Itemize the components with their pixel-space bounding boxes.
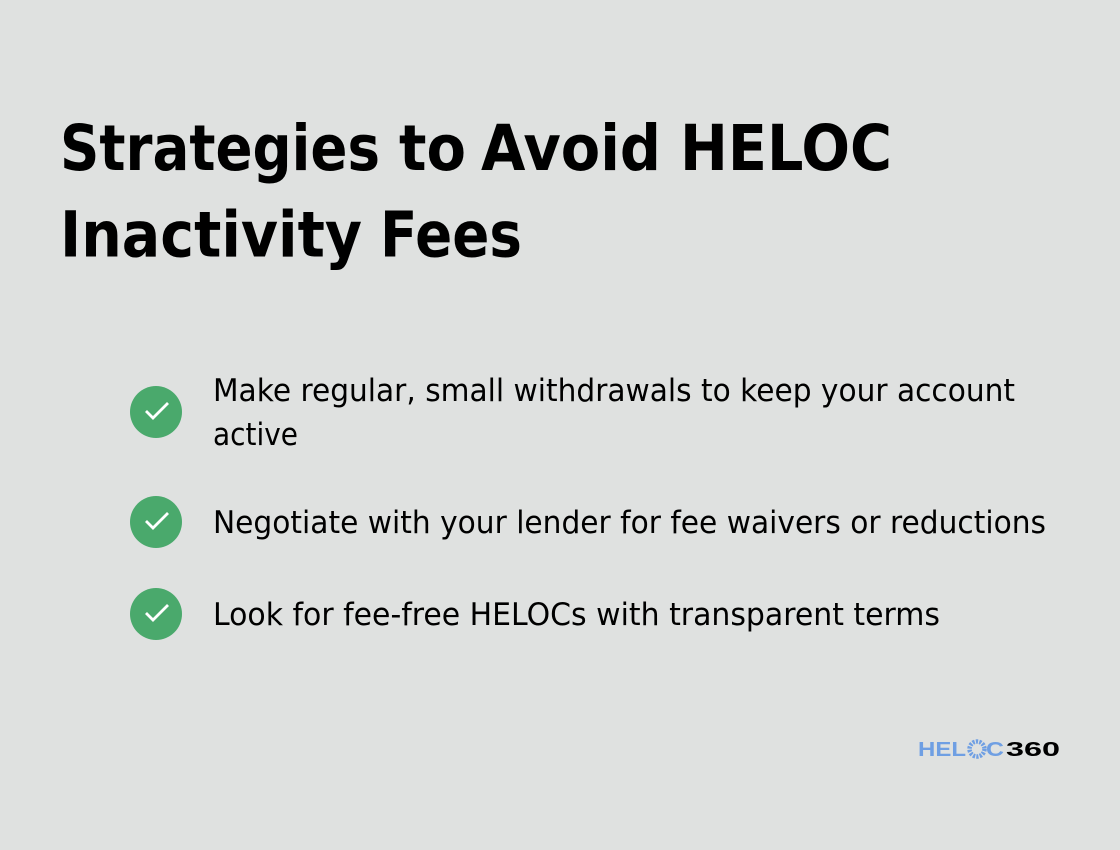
icon: check mark xyxy=(130,386,182,438)
icon: check mark xyxy=(130,496,182,548)
title: Inactivity xyxy=(60,198,362,272)
title: HELOC xyxy=(680,112,892,185)
title: Avoid xyxy=(481,112,661,185)
item text: Make regular, small withdrawals to keep your account xyxy=(213,373,1015,409)
title xyxy=(60,112,892,272)
icon: logo swirl xyxy=(970,742,984,756)
logo: HEL xyxy=(918,739,966,761)
item text xyxy=(213,373,1015,453)
icon: check mark xyxy=(130,588,182,640)
item: regular withdrawals xyxy=(130,373,1015,453)
logo: C xyxy=(986,739,1004,761)
title: to xyxy=(399,112,466,185)
title: Fees xyxy=(380,198,522,272)
item: negotiate xyxy=(130,496,1046,548)
item text: Negotiate with your lender for fee waivers or reductions xyxy=(213,505,1046,541)
logo: 360 xyxy=(1006,739,1060,761)
checklist xyxy=(130,373,1046,640)
title: Strategies xyxy=(60,112,380,185)
logo xyxy=(918,739,1060,761)
item text: Look for fee-free HELOCs with transparent terms xyxy=(213,597,940,633)
item: fee-free xyxy=(130,588,940,640)
item text: active xyxy=(213,417,298,453)
